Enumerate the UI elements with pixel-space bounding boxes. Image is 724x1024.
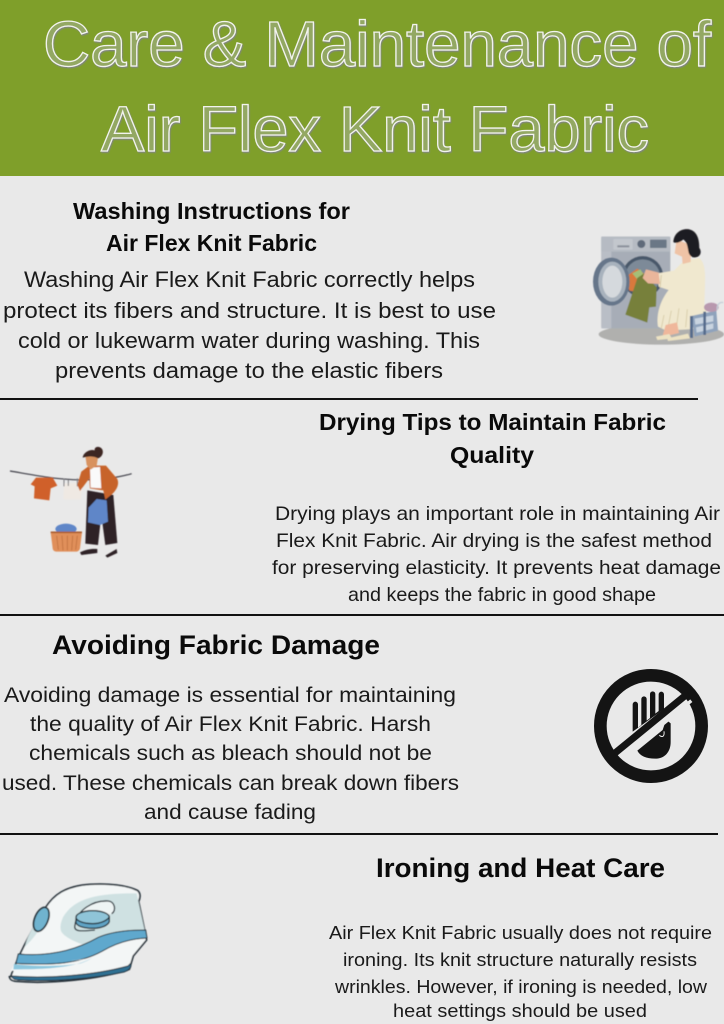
icon: woman at washing machine [593, 229, 724, 345]
heading: damage: Avoiding Fabric Damage [52, 630, 380, 660]
text block: washing: cold or lukewarm water during washing. This [18, 328, 480, 353]
text block: damage: used. These chemicals can break down fibers [2, 772, 459, 795]
icon: woman hanging laundry [10, 447, 132, 558]
text block: drying [272, 503, 721, 606]
text block: damage: and cause fading [144, 801, 316, 824]
title: Care & Maintenance of [43, 8, 711, 80]
text block: ironing: ironing. Its knit structure naturally resists [343, 949, 697, 970]
text block: washing [3, 267, 496, 383]
divider 2 [0, 614, 724, 616]
heading: drying: Quality [450, 442, 534, 468]
text block: damage [2, 684, 459, 824]
text block: drying: and keeps the fabric in good shape [348, 584, 656, 606]
text block: washing: Washing Air Flex Knit Fabric correctly helps [24, 267, 475, 292]
header banner [0, 0, 724, 176]
text block: ironing: Air Flex Knit Fabric usually does not require [329, 922, 712, 943]
heading: washing [73, 198, 350, 256]
text block: ironing: heat settings should be used [393, 1000, 647, 1021]
icon: no hand prohibition sign [600, 675, 702, 777]
heading: ironing: Ironing and Heat Care [376, 853, 665, 883]
icon: clothes iron [9, 884, 147, 982]
heading: drying: Drying Tips to Maintain Fabric [319, 409, 666, 435]
panel: drying tips [10, 409, 721, 606]
panel: avoiding fabric damage [2, 630, 702, 824]
heading: washing: Air Flex Knit Fabric [106, 230, 317, 256]
text block: ironing [329, 922, 712, 1021]
heading: drying [319, 409, 666, 468]
text block: damage: Avoiding damage is essential for maintaining [4, 684, 456, 707]
heading: washing: Washing Instructions for [73, 198, 350, 224]
divider 1 [0, 398, 698, 400]
text block: ironing: wrinkles. However, if ironing is needed, low [334, 976, 708, 997]
text block: washing: protect its fibers and structure. It is best to use [3, 298, 496, 323]
text block: damage: the quality of Air Flex Knit Fabric. Harsh [30, 713, 431, 736]
divider 3 [0, 833, 718, 835]
text block: damage: chemicals such as bleach should not be [29, 742, 432, 765]
title [43, 8, 711, 165]
panel: ironing and heat care [9, 853, 712, 1021]
text block: drying: for preserving elasticity. It prevents heat damage [272, 557, 721, 579]
panel: washing instructions [3, 198, 724, 383]
text block: drying: Flex Knit Fabric. Air drying is the safest method [276, 530, 712, 552]
text block: drying: Drying plays an important role in maintaining Air [275, 503, 721, 525]
title: Air Flex Knit Fabric [101, 93, 649, 165]
text block: washing: prevents damage to the elastic fibers [55, 358, 443, 383]
